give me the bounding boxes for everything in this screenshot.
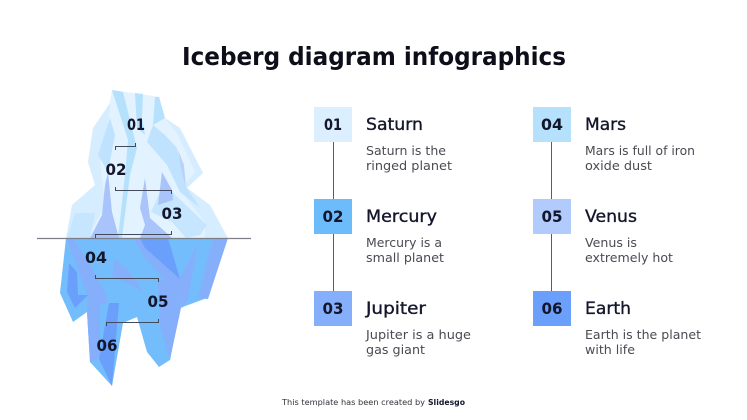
item 03 Jupiter xyxy=(314,291,471,357)
item 05 Venus: extremely hot xyxy=(585,250,673,265)
item 01 Saturn xyxy=(314,107,452,173)
item 04 Mars: Mars is full of iron xyxy=(585,143,695,158)
item 01 Saturn: ringed planet xyxy=(366,158,452,173)
item 06 Earth: with life xyxy=(585,342,635,357)
item 04 Mars xyxy=(533,107,695,173)
right column connector xyxy=(550,142,552,292)
iceberg number labels: 05 xyxy=(148,292,168,311)
footer credit: Slidesgo xyxy=(428,398,465,407)
item 05 Venus: Venus is xyxy=(585,235,637,250)
item 04 Mars: 04 xyxy=(541,115,563,134)
item 02 Mercury: small planet xyxy=(366,250,444,265)
item 04 Mars: Mars xyxy=(585,115,626,134)
item 05 Venus xyxy=(533,199,673,265)
waterline xyxy=(37,238,251,240)
item 01 Saturn: 01 xyxy=(324,115,342,134)
item 03 Jupiter: 03 xyxy=(322,299,344,318)
footer credit: This template has been created by xyxy=(281,398,426,407)
iceberg number labels: 02 xyxy=(106,160,126,179)
item 06 Earth: Earth is the planet xyxy=(585,327,701,342)
item 03 Jupiter: Jupiter xyxy=(365,299,426,318)
item 06 Earth xyxy=(533,291,701,357)
iceberg number labels: 04 xyxy=(85,248,107,267)
item 05 Venus: Venus xyxy=(585,207,637,226)
item 02 Mercury xyxy=(314,199,444,265)
iceberg bottom xyxy=(60,238,228,386)
left column connector xyxy=(332,142,334,292)
item 04 Mars: oxide dust xyxy=(585,158,652,173)
iceberg top xyxy=(66,90,228,238)
iceberg number labels: 03 xyxy=(162,204,182,223)
item 03 Jupiter: Jupiter is a huge xyxy=(365,327,471,342)
item 02 Mercury: Mercury xyxy=(366,207,437,226)
item 01 Saturn: Saturn is the xyxy=(366,143,446,158)
item 05 Venus: 05 xyxy=(542,207,562,226)
item 02 Mercury: Mercury is a xyxy=(366,235,442,250)
iceberg number labels: 06 xyxy=(96,336,118,355)
iceberg number labels xyxy=(85,115,182,355)
item 06 Earth: Earth xyxy=(585,299,631,318)
iceberg diagram xyxy=(37,90,251,386)
item 03 Jupiter: gas giant xyxy=(366,342,425,357)
iceberg number labels: 01 xyxy=(127,115,145,134)
item 06 Earth: 06 xyxy=(542,299,562,318)
item 02 Mercury: 02 xyxy=(322,207,344,226)
connector brackets xyxy=(96,143,172,326)
title: Iceberg diagram infographics xyxy=(182,42,566,71)
item 01 Saturn: Saturn xyxy=(366,115,423,134)
